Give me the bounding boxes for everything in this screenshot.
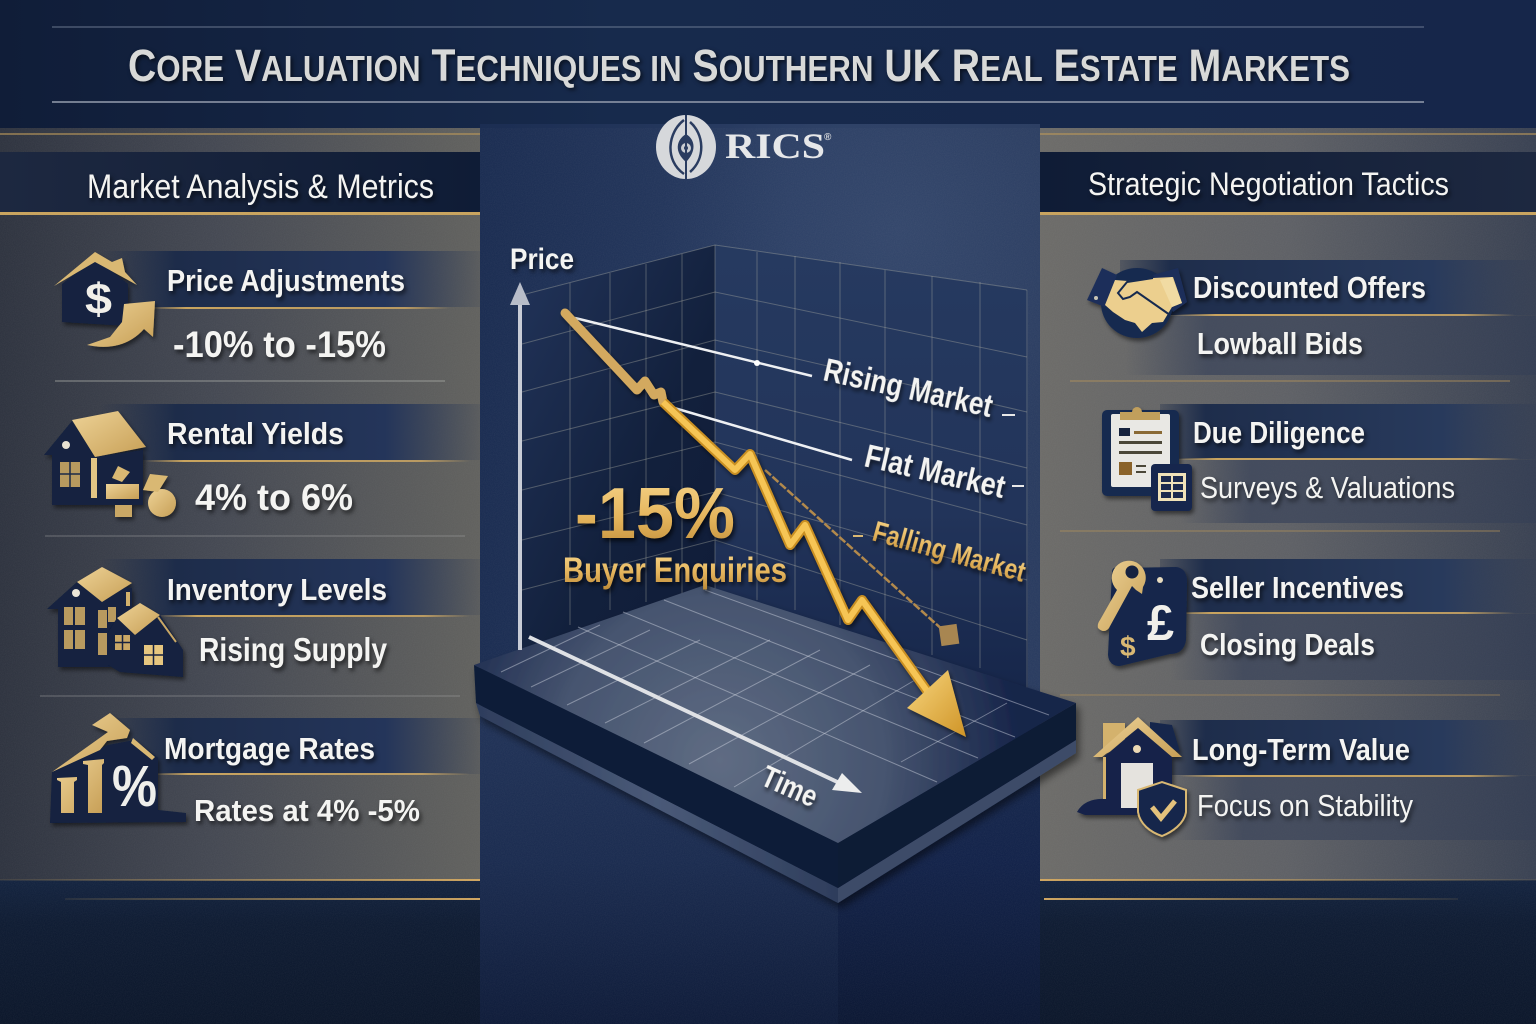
row: inventory levels: Inventory Levels bbox=[167, 572, 387, 607]
row: mortgage rates bbox=[50, 713, 480, 828]
icon: rental house with coin bag bbox=[44, 411, 176, 517]
platform bbox=[474, 585, 1076, 903]
row: rental yields: 4% to 6% bbox=[195, 477, 353, 518]
RICS logo: RICS bbox=[725, 126, 825, 166]
icon: mortgage percent: % bbox=[112, 754, 157, 819]
y axis: price: Price bbox=[510, 243, 574, 276]
back walls bbox=[520, 245, 1028, 690]
icon: clipboard and calculator bbox=[1102, 407, 1192, 511]
row: discounted offers: Discounted Offers bbox=[1193, 270, 1426, 305]
RICS logo: ® bbox=[824, 132, 832, 143]
row: seller incentives bbox=[1098, 559, 1536, 680]
bottom rules bbox=[0, 879, 1536, 900]
callout: -15% buyer enquiries bbox=[563, 474, 787, 590]
row: rental yields: Rental Yields bbox=[167, 416, 344, 451]
icon: two houses bbox=[47, 567, 183, 677]
row: mortgage rates: Mortgage Rates bbox=[164, 731, 375, 766]
icon: handshake bbox=[1087, 268, 1187, 338]
row: long-term value: Long-Term Value bbox=[1192, 732, 1410, 767]
line: rising market bbox=[575, 318, 1015, 424]
line: rising market: Rising Market bbox=[820, 352, 996, 424]
row: due diligence: Surveys & Valuations bbox=[1200, 470, 1455, 505]
icon: house with shield bbox=[1077, 717, 1186, 836]
heading: market analysis bbox=[0, 152, 480, 215]
x axis: time: Time bbox=[756, 758, 823, 814]
icon: key and pound tag: £ bbox=[1147, 595, 1174, 651]
icon: key and pound tag bbox=[1098, 561, 1187, 666]
row: mortgage rates: Rates at 4% -5% bbox=[194, 793, 420, 828]
row: discounted offers bbox=[1087, 260, 1536, 375]
row: inventory levels: Rising Supply bbox=[199, 631, 388, 668]
heading: market analysis: Market Analysis & Metrics bbox=[87, 168, 434, 206]
icon: key and pound tag: $ bbox=[1120, 631, 1136, 662]
icon: house with dollar and arrow bbox=[54, 252, 155, 347]
row: due diligence bbox=[1102, 404, 1536, 523]
row: inventory levels bbox=[47, 559, 480, 677]
y axis: price bbox=[510, 243, 574, 650]
RICS logo bbox=[656, 115, 832, 179]
x axis: time bbox=[529, 637, 862, 814]
icon: mortgage percent bbox=[50, 713, 186, 823]
line: falling market: Falling Market bbox=[869, 516, 1029, 589]
heading: strategic negotiation: Strategic Negotiation Tactics bbox=[1088, 166, 1449, 202]
line: flat market: Flat Market bbox=[861, 438, 1009, 505]
row: rental yields bbox=[44, 404, 480, 518]
row: seller incentives: Closing Deals bbox=[1200, 627, 1375, 662]
chart: 3D price versus time bbox=[474, 243, 1076, 903]
heading: strategic negotiation bbox=[1040, 152, 1536, 215]
icon: house with dollar and arrow: $ bbox=[85, 275, 112, 324]
row: price adjustments: Price Adjustments bbox=[167, 263, 405, 298]
line: falling market bbox=[765, 470, 1029, 646]
arrow: falling gold trend line bbox=[565, 313, 966, 737]
row: seller incentives: Seller Incentives bbox=[1191, 570, 1404, 605]
row: long-term value bbox=[1077, 717, 1536, 840]
row: discounted offers: Lowball Bids bbox=[1197, 326, 1363, 361]
callout: -15% buyer enquiries: Buyer Enquiries bbox=[563, 551, 787, 590]
title: CORE VALUATION TECHNIQUES IN SOUTHERN UK REAL ESTATE MARKETS bbox=[128, 40, 1350, 91]
line: flat market bbox=[664, 405, 1024, 505]
panel: market analysis and metrics bbox=[0, 152, 480, 828]
row: price adjustments: -10% to -15% bbox=[173, 324, 386, 365]
row: long-term value: Focus on Stability bbox=[1197, 788, 1413, 823]
callout: -15% buyer enquiries: -15% bbox=[575, 474, 735, 554]
row: due diligence: Due Diligence bbox=[1193, 415, 1365, 450]
panel: strategic negotiation tactics bbox=[1040, 152, 1536, 840]
row: price adjustments bbox=[54, 251, 480, 365]
